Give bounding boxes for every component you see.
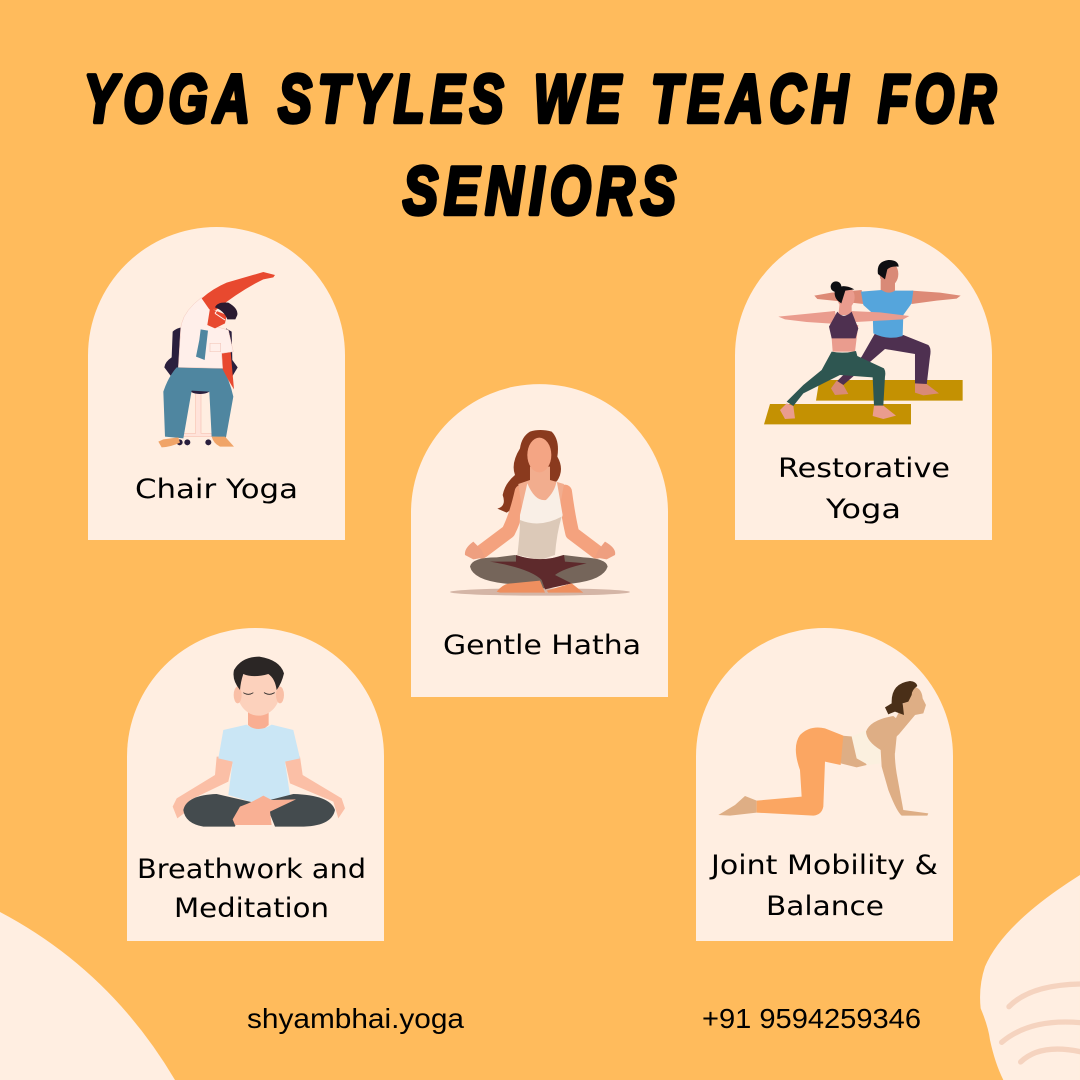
label: joint mobility and balance: [709, 850, 938, 922]
label: restorative yoga: Yoga: [825, 494, 901, 525]
icon: man meditating: [173, 657, 345, 827]
panel: breathwork and meditation: [127, 628, 384, 941]
label: chair yoga: Chair Yoga: [135, 474, 298, 505]
icon: man stretching on chair: [158, 272, 275, 447]
icon: woman in cat-cow pose: [718, 681, 928, 816]
icon: couple in warrior pose on mats: [764, 260, 963, 424]
label: restorative yoga: Restorative: [778, 453, 950, 484]
label: restorative yoga: [778, 453, 950, 525]
panel: joint mobility and balance: [696, 628, 953, 941]
label: joint mobility and balance: Joint Mobility &: [709, 850, 938, 881]
icon: woman meditating: [450, 430, 630, 596]
title: [84, 61, 1002, 229]
decorative blob: bottom right with lines: [980, 875, 1080, 1080]
title: SENIORS: [403, 153, 682, 229]
label: breathwork and meditation: Breathwork and: [137, 854, 366, 885]
label: breathwork and meditation: [137, 854, 366, 924]
footer: phone: +91 9594259346: [702, 1003, 921, 1034]
footer: website: shyambhai.yoga: [247, 1003, 464, 1034]
label: joint mobility and balance: Balance: [766, 891, 884, 922]
decorative blob: bottom left: [0, 912, 175, 1080]
panel: restorative yoga: [735, 227, 992, 540]
label: breathwork and meditation: Meditation: [174, 893, 329, 924]
label: gentle hatha: Gentle Hatha: [443, 630, 641, 661]
panel: gentle hatha: [411, 384, 668, 697]
panel: chair yoga: [88, 227, 345, 540]
